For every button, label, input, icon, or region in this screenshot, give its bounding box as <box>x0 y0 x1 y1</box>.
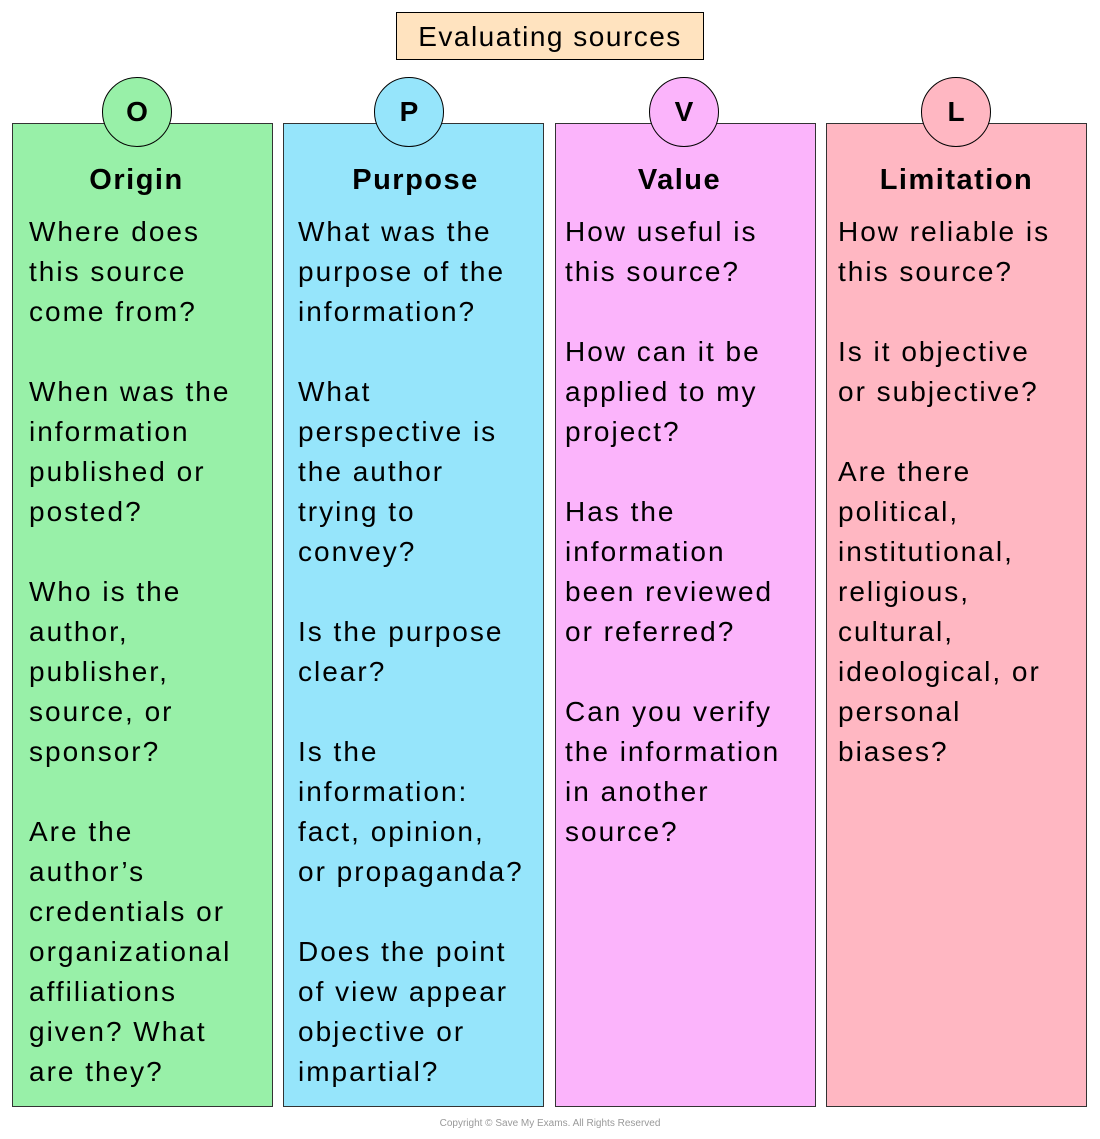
icon: L circle: L <box>947 96 965 127</box>
heading: limitation: Limitation <box>880 164 1033 196</box>
text: purpose questions: Is the purpose <box>298 616 503 647</box>
text: value questions: in another <box>565 776 710 807</box>
icon: P circle: P <box>400 96 418 127</box>
text: origin questions: published or <box>29 456 206 487</box>
panel: purpose <box>283 123 544 1107</box>
title <box>396 12 704 60</box>
text: value questions: source? <box>565 816 679 847</box>
icon: P circle <box>374 77 444 147</box>
text: origin questions: come from? <box>29 296 197 327</box>
title: Evaluating sources <box>418 21 682 52</box>
heading: value: Value <box>638 164 721 196</box>
icon: O circle <box>102 77 172 147</box>
text: purpose questions: clear? <box>298 656 386 687</box>
text: limitation questions: political, <box>838 496 959 527</box>
text: purpose questions: convey? <box>298 536 416 567</box>
text: value questions: applied to my <box>565 376 758 407</box>
heading: origin: Origin <box>89 164 184 196</box>
text: limitation questions: this source? <box>838 256 1013 287</box>
text: purpose questions: What <box>298 376 371 407</box>
text: purpose questions: the author <box>298 456 444 487</box>
text: purpose questions: purpose of the <box>298 256 505 287</box>
text: origin questions: this source <box>29 256 186 287</box>
text: origin questions: affiliations <box>29 976 177 1007</box>
text: value questions: How can it be <box>565 336 761 367</box>
text: value questions: been reviewed <box>565 576 773 607</box>
panel: value <box>555 123 816 1107</box>
text: purpose questions: objective or <box>298 1016 465 1047</box>
panel: limitation <box>826 123 1087 1107</box>
text: origin questions: Where does <box>29 216 200 247</box>
text: value questions: the information <box>565 736 780 767</box>
icon: O circle: O <box>126 96 148 127</box>
text: purpose questions: fact, opinion, <box>298 816 485 847</box>
text: purpose questions: Is the <box>298 736 378 767</box>
text: limitation questions: ideological, or <box>838 656 1041 687</box>
text: origin questions: When was the <box>29 376 230 407</box>
text: origin questions: organizational <box>29 936 231 967</box>
text: origin questions: information <box>29 416 190 447</box>
copyright: Copyright © Save My Exams. All Rights Reserved <box>440 1118 660 1129</box>
text: origin questions: credentials or <box>29 896 225 927</box>
text: purpose questions: impartial? <box>298 1056 439 1087</box>
text: purpose questions: What was the <box>298 216 492 247</box>
text: value questions: this source? <box>565 256 740 287</box>
text: limitation questions: institutional, <box>838 536 1014 567</box>
text: value questions: information <box>565 536 726 567</box>
text: origin questions: given? What <box>29 1016 207 1047</box>
text: limitation questions: religious, <box>838 576 970 607</box>
text: origin questions: Who is the <box>29 576 181 607</box>
text: limitation questions: Is it objective <box>838 336 1030 367</box>
text: origin questions: Are the <box>29 816 133 847</box>
text: origin questions: are they? <box>29 1056 164 1087</box>
text: origin questions <box>29 216 231 1087</box>
text: purpose questions: information: <box>298 776 468 807</box>
text: purpose questions: information? <box>298 296 476 327</box>
text: origin questions: author’s <box>29 856 145 887</box>
text: value questions: Can you verify <box>565 696 772 727</box>
text: origin questions: sponsor? <box>29 736 160 767</box>
text: value questions: or referred? <box>565 616 735 647</box>
text: origin questions: source, or <box>29 696 174 727</box>
icon: V circle: V <box>675 96 693 127</box>
text: value questions <box>565 216 780 847</box>
text: purpose questions: Does the point <box>298 936 507 967</box>
text: purpose questions: of view appear <box>298 976 508 1007</box>
text: purpose questions <box>298 216 524 1087</box>
text: limitation questions: How reliable is <box>838 216 1050 247</box>
text: limitation questions: Are there <box>838 456 971 487</box>
panel: origin <box>12 123 273 1107</box>
text: origin questions: posted? <box>29 496 143 527</box>
text: limitation questions: or subjective? <box>838 376 1039 407</box>
text: purpose questions: or propaganda? <box>298 856 524 887</box>
text: limitation questions: cultural, <box>838 616 954 647</box>
heading: purpose: Purpose <box>352 164 479 196</box>
text: value questions: Has the <box>565 496 676 527</box>
text: limitation questions <box>838 216 1050 767</box>
icon: L circle <box>921 77 991 147</box>
icon: V circle <box>649 77 719 147</box>
text: purpose questions: perspective is <box>298 416 497 447</box>
text: value questions: project? <box>565 416 681 447</box>
text: limitation questions: biases? <box>838 736 949 767</box>
text: origin questions: publisher, <box>29 656 169 687</box>
text: value questions: How useful is <box>565 216 758 247</box>
text: limitation questions: personal <box>838 696 961 727</box>
text: origin questions: author, <box>29 616 129 647</box>
text: purpose questions: trying to <box>298 496 416 527</box>
